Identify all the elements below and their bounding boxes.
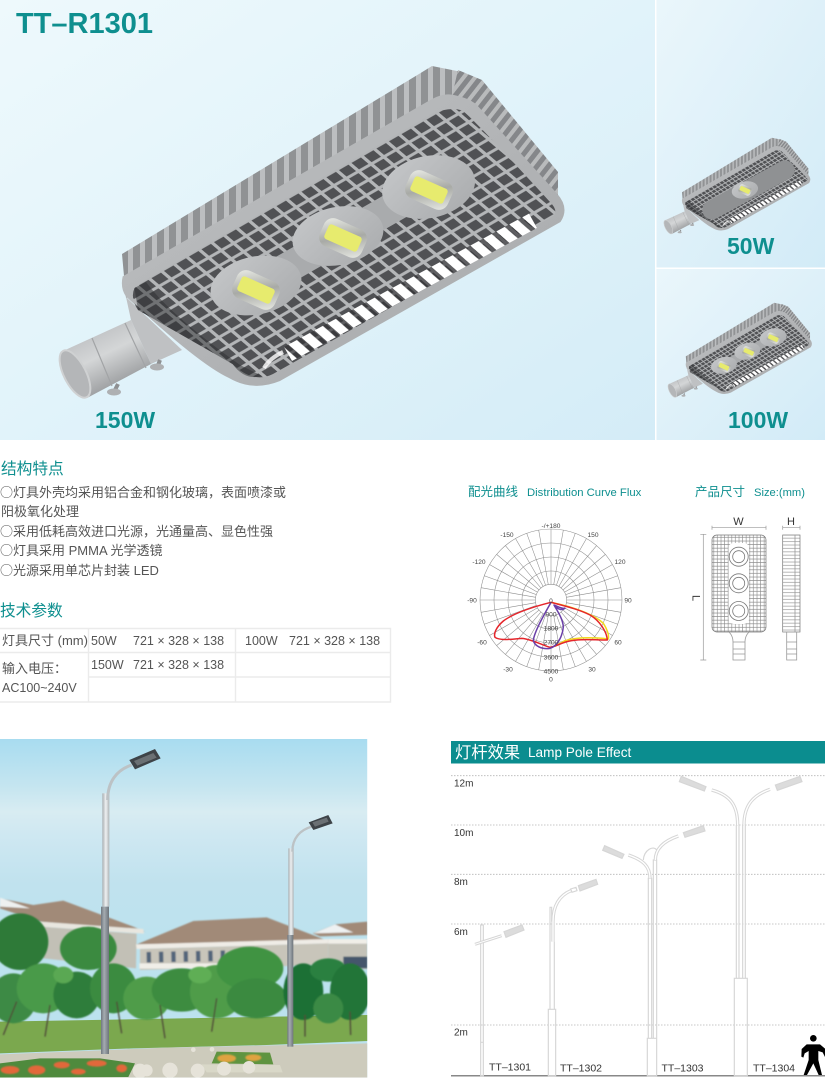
icon: pedestrian scale figure	[801, 1035, 825, 1075]
chart: lamp pole height comparison: 12m	[454, 778, 473, 790]
label: 50W: 50W	[727, 233, 775, 259]
chart: polar light distribution: 0	[549, 598, 553, 605]
product photo: 50W street lamp	[662, 138, 810, 235]
panel: 50W background	[656, 0, 825, 268]
photo: street lamps in a landscaped residential area	[0, 739, 370, 1078]
chart: polar light distribution: 60	[614, 640, 622, 646]
diagram: product dimensions: L	[690, 595, 702, 601]
chart: lamp pole height comparison: TT–1301	[489, 1062, 531, 1074]
table: technical parameters: 721 × 328 × 138	[289, 634, 380, 648]
heading: product size	[695, 485, 805, 499]
heading: structure features: 结构特点	[1, 460, 64, 478]
chart: polar light distribution: -150	[500, 532, 514, 539]
trees	[0, 913, 370, 1038]
product photo: 150W street lamp	[53, 66, 565, 402]
heading: technical parameters: 技术参数	[0, 602, 63, 620]
light pole right	[287, 815, 333, 1047]
label: 100W: 100W	[728, 407, 788, 433]
chart: polar light distribution: 120	[614, 559, 626, 566]
label: 150W: 150W	[95, 407, 155, 433]
buildings	[0, 898, 367, 970]
product photo: 100W street lamp	[666, 303, 812, 399]
table: technical parameters: 50W	[91, 634, 117, 648]
chart: polar light distribution: 30	[588, 666, 596, 674]
road	[0, 1043, 367, 1078]
diagram: product dimensions: W	[733, 516, 744, 528]
heading bar: lamp pole effect: Lamp Pole Effect	[528, 745, 631, 760]
table: technical parameters: 灯具尺寸 (mm)	[2, 633, 88, 648]
table: technical parameters: 150W	[91, 658, 124, 672]
chart: lamp pole height comparison: 8m	[454, 877, 468, 888]
text block: feature list	[0, 482, 286, 579]
chart: polar light distribution: -120	[472, 559, 486, 566]
text block: feature list: ○灯具采用 PMMA 光学透镜	[0, 540, 163, 559]
chart: lamp pole height comparison: TT–1303	[662, 1062, 704, 1074]
chart: lamp pole height comparison: 6m	[454, 927, 468, 938]
panel: 100W background	[656, 269, 825, 440]
chart: lamp pole height comparison: TT–1304	[753, 1062, 795, 1074]
chart: polar light distribution: 0	[549, 676, 553, 684]
diagram: product dimensions: H	[787, 516, 795, 528]
flower bed center	[202, 1052, 283, 1072]
text block: feature list: 阳极氧化处理	[1, 504, 79, 519]
heading: distribution curve flux	[468, 485, 642, 499]
chart: polar light distribution: -/+180	[542, 523, 561, 530]
table: technical parameters: 721 × 328 × 138	[133, 658, 224, 672]
heading: distribution curve flux: 配光曲线	[468, 485, 519, 499]
chart: lamp pole height comparison: TT–1302	[560, 1062, 602, 1074]
flower bed left	[0, 1058, 135, 1078]
chart: polar light distribution: 3600	[544, 654, 559, 662]
sky	[0, 739, 367, 1078]
heading: product size: Size:(mm)	[754, 487, 805, 499]
table: technical parameters	[0, 628, 390, 702]
light pole left	[101, 749, 161, 1054]
pole TT-1303	[603, 826, 705, 1076]
text block: feature list: ○灯具外壳均采用铝合金和钢化玻璃，表面喷漆或	[0, 482, 286, 501]
heading bar: lamp pole effect: 灯杆效果	[455, 744, 520, 762]
chart: polar light distribution: 900	[545, 612, 557, 618]
pole TT-1301	[475, 925, 524, 1076]
chart: polar light distribution: 4500	[544, 668, 559, 676]
heading bar: lamp pole effect	[451, 741, 825, 764]
table: technical parameters: AC100~240V	[2, 681, 77, 695]
text block: feature list: ○采用低耗高效进口光源，光通量高、显色性强	[0, 521, 273, 540]
panel: product hero background	[0, 0, 655, 440]
poles	[475, 776, 802, 1076]
chart: polar light distribution: -90	[467, 598, 477, 604]
chart: polar light distribution	[467, 523, 632, 684]
pole TT-1302	[548, 879, 598, 1076]
chart: lamp pole height comparison: 2m	[454, 1028, 468, 1038]
title: TT–R1301	[16, 8, 153, 40]
chart: polar light distribution: 150	[587, 532, 599, 539]
text block: feature list: ○光源采用单芯片封装 LED	[0, 560, 159, 579]
table: technical parameters: 输入电压：	[2, 661, 67, 676]
table: technical parameters: 100W	[245, 634, 278, 648]
heading: distribution curve flux: Distribution Curve Flux	[527, 487, 642, 499]
chart: lamp pole height comparison: 10m	[454, 828, 473, 839]
diagram: product dimensions	[690, 516, 800, 660]
grass	[0, 1015, 367, 1053]
chart: polar light distribution: -30	[503, 666, 513, 674]
chart: lamp pole height comparison	[451, 776, 825, 1076]
pole TT-1304	[679, 776, 802, 1076]
chart: polar light distribution: 90	[624, 598, 632, 604]
chart: polar light distribution: -60	[477, 640, 487, 646]
table: technical parameters: 721 × 328 × 138	[133, 634, 224, 648]
chart: polar light distribution: 2700	[544, 640, 559, 646]
heading: product size: 产品尺寸	[695, 485, 745, 499]
chart: polar light distribution: 1800	[544, 626, 559, 632]
stone bollards	[133, 1047, 255, 1078]
